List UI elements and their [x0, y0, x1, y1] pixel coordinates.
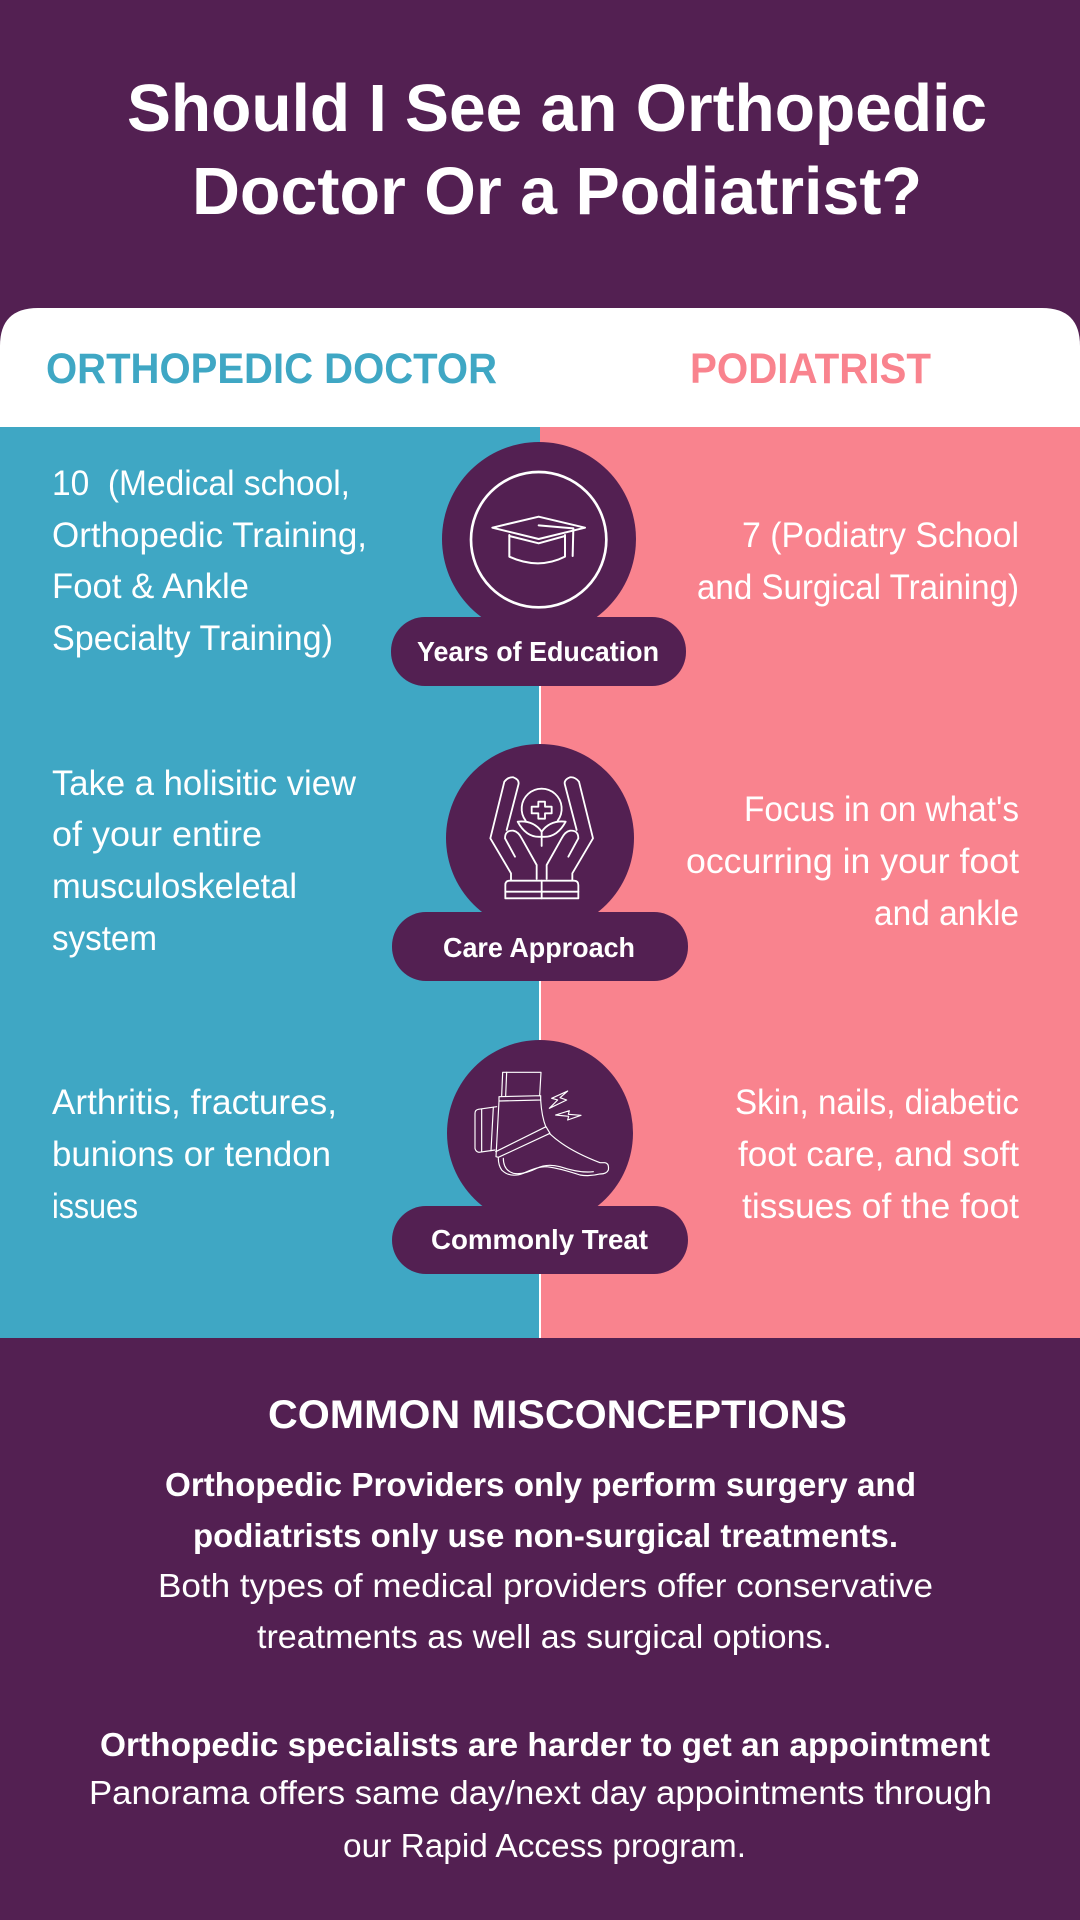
misconception one — [158, 1466, 933, 1655]
text: podiatrist years of education — [697, 516, 1019, 607]
text: orthopedic care approach — [52, 764, 357, 958]
text: podiatrist commonly treat — [735, 1083, 1019, 1226]
text: orthopedic care approach: system — [52, 919, 157, 958]
label: commonly treat: Commonly Treat — [431, 1224, 648, 1255]
heading: common misconceptions: COMMON MISCONCEPTIONS — [268, 1393, 847, 1437]
text: orthopedic years of education — [52, 464, 367, 658]
text: orthopedic care approach: Take a holisitic view — [52, 764, 357, 803]
title: Doctor Or a Podiatrist? — [192, 154, 922, 229]
misconception one: Both types of medical providers offer conservative — [158, 1567, 933, 1604]
label: years of education: Years of Education — [417, 636, 659, 667]
text: podiatrist care approach: occurring in your foot — [686, 842, 1019, 881]
text: orthopedic years of education: Specialty Training) — [52, 619, 333, 658]
badge: care approach — [392, 744, 688, 981]
text: orthopedic commonly treat — [52, 1083, 337, 1226]
heading: orthopedic doctor: ORTHOPEDIC DOCTOR — [46, 345, 497, 393]
misconception two: Orthopedic specialists are harder to get an appointment — [100, 1726, 990, 1763]
misconception two: Panorama offers same day/next day appointments through — [89, 1774, 992, 1811]
text: podiatrist commonly treat: tissues of the foot — [742, 1187, 1019, 1226]
text: podiatrist care approach — [686, 790, 1019, 933]
badge: commonly treat — [392, 1040, 688, 1274]
title: Should I See an Orthopedic — [127, 71, 987, 146]
column header band — [0, 308, 1080, 427]
title — [127, 71, 987, 229]
text: podiatrist commonly treat: foot care, and soft — [738, 1135, 1019, 1174]
text: podiatrist years of education: and Surgical Training) — [697, 568, 1019, 607]
text: orthopedic care approach: musculoskeletal — [52, 867, 297, 906]
text: orthopedic commonly treat: Arthritis, fractures, — [52, 1083, 337, 1122]
text: orthopedic years of education: Foot & Ankle — [52, 567, 249, 606]
text: podiatrist care approach: and ankle — [874, 894, 1019, 933]
misconception two — [89, 1726, 992, 1864]
misconception one: treatments as well as surgical options. — [257, 1618, 832, 1655]
text: orthopedic years of education: 10 (Medical school, — [52, 464, 350, 503]
panel: orthopedic column — [0, 427, 540, 1338]
text: orthopedic years of education: Orthopedic Training, — [52, 516, 367, 555]
badge: years of education — [391, 442, 686, 686]
misconception two: our Rapid Access program. — [343, 1827, 746, 1864]
text: orthopedic commonly treat: issues — [52, 1187, 138, 1226]
panel: common misconceptions — [89, 1393, 992, 1864]
text: orthopedic commonly treat: bunions or tendon — [52, 1135, 331, 1174]
panel: podiatrist column — [540, 427, 1080, 1338]
misconception one: podiatrists only use non-surgical treatments. — [193, 1517, 898, 1554]
icon: braced foot with pain bolts — [475, 1072, 609, 1176]
label: care approach: Care Approach — [443, 932, 635, 963]
text: podiatrist care approach: Focus in on what's — [744, 790, 1019, 829]
text: podiatrist commonly treat: Skin, nails, diabetic — [735, 1083, 1019, 1122]
misconception one: Orthopedic Providers only perform surgery and — [165, 1466, 916, 1503]
icon: hands holding plant with cross — [490, 777, 593, 898]
heading: podiatrist: PODIATRIST — [690, 345, 931, 393]
text: podiatrist years of education: 7 (Podiatry School — [742, 516, 1019, 555]
text: orthopedic care approach: of your entire — [52, 815, 262, 854]
icon: graduation cap — [471, 472, 606, 607]
